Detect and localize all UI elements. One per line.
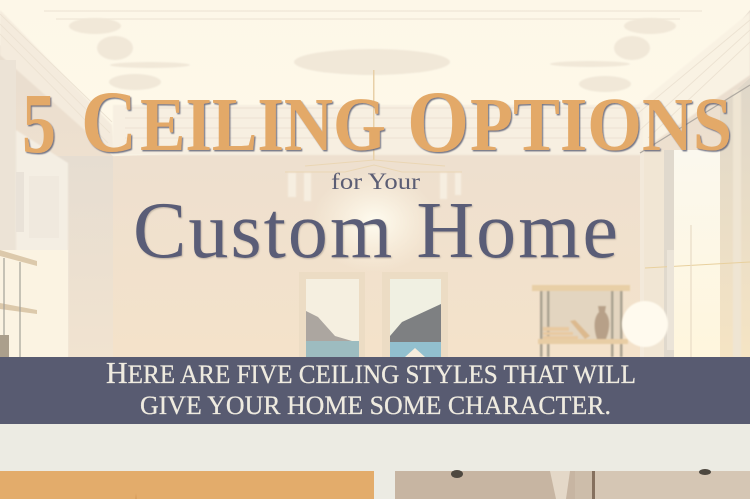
heading: 5 Ceiling Options: O [407,74,469,171]
banner: intro [0,355,750,424]
ceiling ornaments [69,18,676,92]
panel: orange section [0,471,374,499]
banner text: HERE ARE FIVE CEILING STYLES THAT WILL [106,355,636,390]
panel: ceiling photo [395,469,750,499]
heading: 5 Ceiling Options: C [81,74,137,171]
globe lamp [622,301,668,347]
heading: Custom Home: Custom Home [133,187,618,275]
banner text [106,355,636,420]
heading: 5 Ceiling Options [22,74,732,171]
subheading: for Your: for Your [331,169,420,194]
panel: lower background strip [0,424,750,499]
banner text: GIVE YOUR HOME SOME CHARACTER. [140,391,611,420]
window and curtains right [640,78,750,357]
left door and shelves [0,156,113,357]
heading: 5 Ceiling Options: PTIONS [470,83,732,167]
chandelier [285,70,462,272]
ceiling [0,0,750,156]
framed pictures [299,272,448,357]
heading: 5 Ceiling Options: 5 [22,75,56,171]
background: room photo [0,0,750,357]
heading: 5 Ceiling Options: EILING [140,83,386,167]
shelf and vase [532,285,630,357]
